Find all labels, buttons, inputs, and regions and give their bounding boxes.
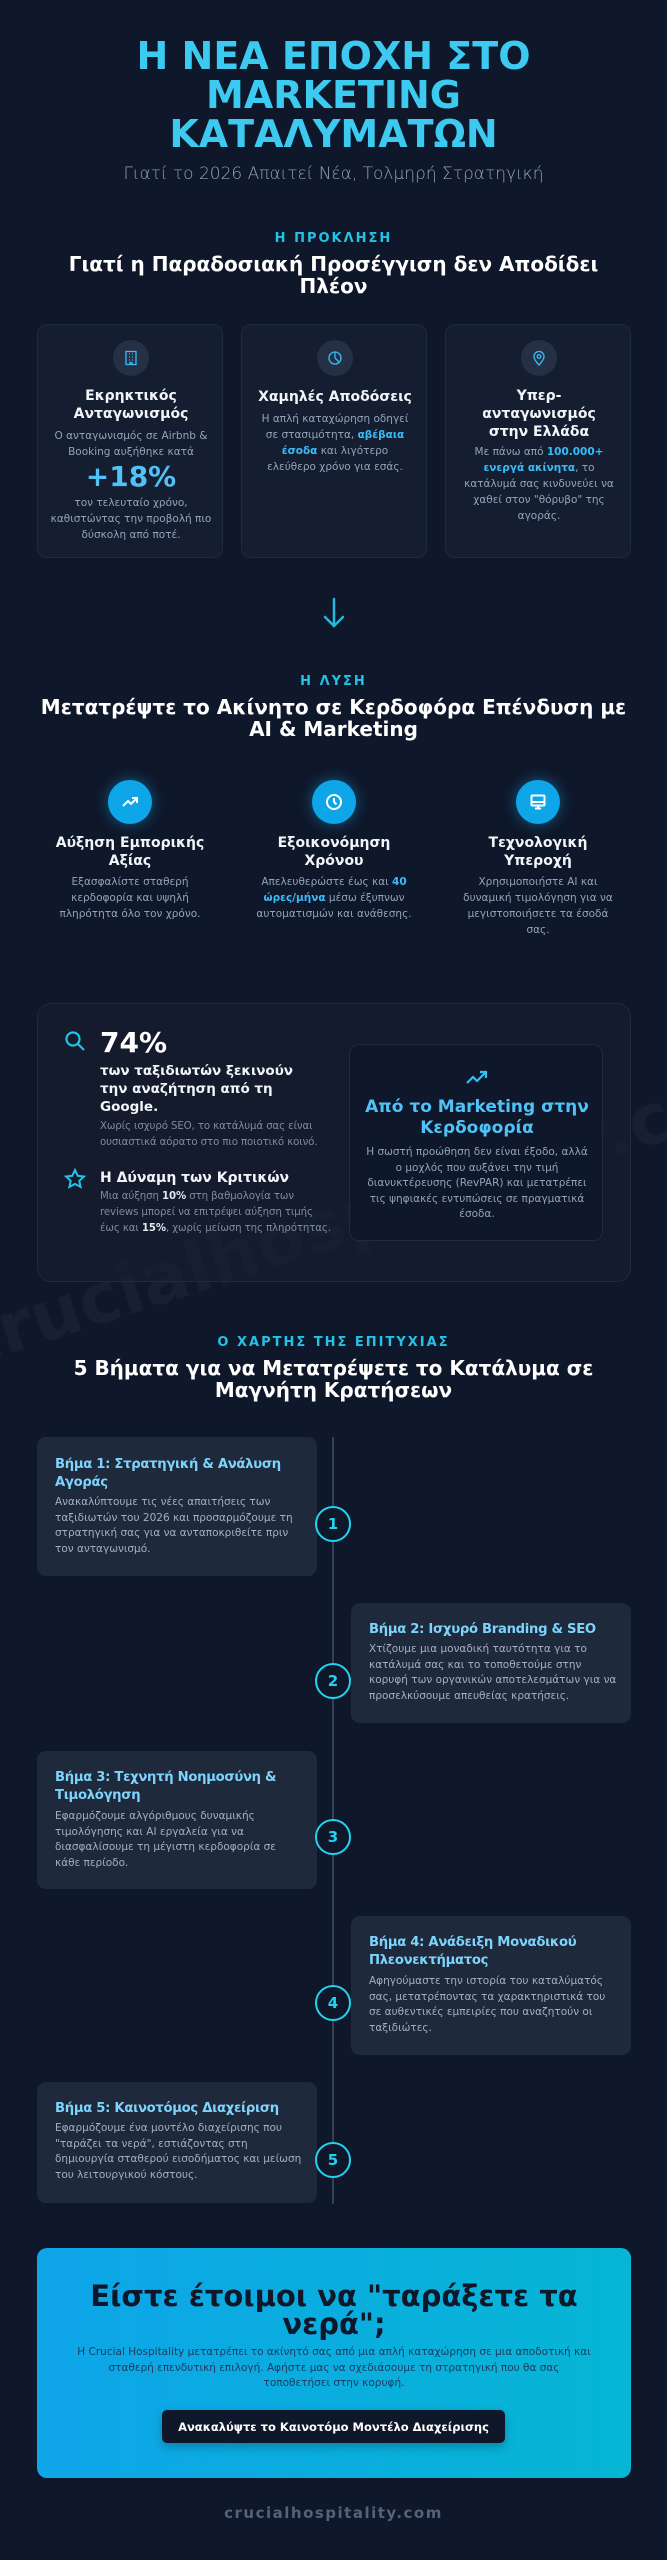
icon: trend	[466, 1070, 488, 1084]
panel: call to action	[37, 2248, 631, 2478]
callout: marketing to profit: Από το Marketing στην Κερδοφορία	[365, 1097, 589, 1138]
step 4: Αφηγούμαστε την ιστορία του καταλύματός σας, μετατρέποντας τα χαρακτηριστικά του σε αυθεντικές εμπειρίες που αναζητούν οι ταξιδιώτες.	[369, 1975, 605, 2034]
subtitle: Γιατί το 2026 Απαιτεί Νέα, Τολμηρή Στρατηγική	[123, 164, 544, 184]
step 5: Βήμα 5: Καινοτόμος Διαχείριση	[55, 2101, 279, 2116]
step 4: Βήμα 4: Ανάδειξη Μοναδικού Πλεονεκτήματος	[369, 1935, 576, 1968]
marker 5: 5	[328, 2151, 338, 2169]
title: MARKETING	[206, 73, 461, 117]
step 1: Ανακαλύπτουμε τις νέες απαιτήσεις των ταξιδιωτών του 2026 και προσαρμόζουμε τη στρατηγική σας για να ανταποκριθείτε πριν τον ανταγωνισμό.	[55, 1496, 293, 1555]
card: competition: +18%	[86, 460, 176, 493]
cta heading: Είστε έτοιμοι να "ταράξετε τα νερά";	[90, 2279, 578, 2341]
card: competition: Ανταγωνισμός	[74, 406, 188, 422]
card: greece: Υπερ-	[517, 388, 561, 404]
heading: roadmap: 5 Βήματα για να Μετατρέψετε το Κατάλυμα σε Μαγνήτη Κρατήσεων	[74, 1356, 593, 1402]
cta button: Ανακαλύψτε το Καινοτόμο Μοντέλο Διαχείρισης	[178, 2420, 489, 2434]
step 2: Χτίζουμε μια μοναδική ταυτότητα για το κατάλυμά σας και το τοποθετούμε στην κορυφή των οργανικών αποτελεσμάτων για να προσελκύσουμε απευθείας κρατήσεις.	[369, 1643, 616, 1702]
card: low returns: Χαμηλές Αποδόσεις	[258, 389, 412, 405]
step 3: Εφαρμόζουμε αλγόριθμους δυναμικής τιμολόγησης και AI εργαλεία για να διασφαλίσουμε τη μέγιστη κερδοφορία σε κάθε περίοδο.	[55, 1810, 276, 1869]
panel: solution benefits	[56, 772, 613, 936]
card: greece	[445, 324, 631, 558]
icon: search	[65, 1031, 85, 1051]
card: competition: τον τελευταίο χρόνο, καθιστώντας την προβολή πιο δύσκολη από ποτέ.	[51, 497, 211, 541]
step 2	[351, 1603, 631, 1723]
marker 2: 2	[328, 1672, 338, 1690]
callout: marketing to profit: Η σωστή προώθηση δεν είναι έξοδο, αλλά ο μοχλός που αυξάνει την τιμή διανυκτέρευσης (RevPAR) και μετατρέπει τις ψηφιακές εντυπώσεις σε πραγματικά έσοδα.	[366, 1146, 588, 1220]
icon: star	[64, 1168, 86, 1189]
cta text: Η Crucial Hospitality μετατρέπει το ακίνητό σας από μια απλή καταχώρηση σε μια αποδοτική και σταθερή επενδυτική επιλογή. Αφήστε μας να σχεδιάσουμε τη στρατηγική που θα σας τοποθετήσει στην κορυφή.	[77, 2346, 591, 2389]
card: competition	[37, 324, 223, 558]
stat: 74%: 74%	[100, 1026, 167, 1059]
icon: pin	[521, 340, 557, 376]
step 1	[37, 1437, 317, 1576]
marker 4: 4	[328, 1994, 338, 2012]
benefit: tech	[463, 772, 613, 936]
stat: 74%: των ταξιδιωτών ξεκινούν την αναζήτηση από τη Google.	[100, 1063, 293, 1115]
step 5	[37, 2082, 317, 2203]
step 5: Εφαρμόζουμε ένα μοντέλο διαχείρισης που "ταράζει τα νερά", εστιάζοντας στη δημιουργία σταθερού εισοδήματος και μείωση του λειτουργικού κόστους.	[55, 2122, 301, 2181]
marker 1: 1	[328, 1515, 338, 1533]
benefit: tech: Υπεροχή	[504, 853, 572, 869]
card: greece: στην Ελλάδα	[489, 424, 589, 440]
timeline	[37, 1437, 631, 2204]
benefit: tech: Τεχνολογική	[489, 835, 587, 851]
marker 3: 3	[328, 1828, 338, 1846]
label: solution: Η ΛΥΣΗ	[300, 674, 367, 689]
footer: crucialhospitality.com	[224, 2504, 443, 2522]
step 3: Βήμα 3: Τεχνητή Νοημοσύνη & Τιμολόγηση	[55, 1770, 276, 1803]
icon: clock	[312, 780, 356, 824]
card: greece: Με πάνω από 100.000+ ενεργά ακίνητα, το κατάλυμά σας κινδυνεύει να χαθεί στον "θόρυβο" της αγοράς.	[464, 446, 614, 522]
stat: reviews: Μια αύξηση 10% στη βαθμολογία των reviews μπορεί να επιτρέψει αύξηση τιμής έως και 15%, χωρίς μείωση της πληρότητας.	[100, 1191, 331, 1234]
benefit: value	[56, 772, 204, 920]
benefit: time: Εξοικονόμηση	[278, 835, 390, 851]
label: challenge: Η ΠΡΟΚΛΗΣΗ	[275, 231, 392, 246]
stat: reviews: Η Δύναμη των Κριτικών	[100, 1170, 289, 1186]
panel: challenge cards	[37, 324, 631, 558]
step 1: Βήμα 1: Στρατηγική & Ανάλυση Αγοράς	[55, 1457, 281, 1490]
icon: monitor	[516, 780, 560, 824]
title: ΚΑΤΑΛΥΜΑΤΩΝ	[169, 112, 498, 156]
marker 4	[315, 1985, 351, 2021]
callout: marketing to profit	[349, 1044, 603, 1241]
step 4	[351, 1916, 631, 2055]
marker 5	[315, 2142, 351, 2178]
icon: trending up	[108, 780, 152, 824]
title: Η ΝΕΑ ΕΠΟΧΗ ΣΤΟ	[136, 34, 530, 78]
benefit: value: Εξασφαλίστε σταθερή κερδοφορία και υψηλή πληρότητα όλο τον χρόνο.	[60, 876, 200, 920]
cta button	[162, 2410, 505, 2443]
marker 2	[315, 1663, 351, 1699]
card: low returns: Η απλή καταχώρηση οδηγεί σε στασιμότητα, αβέβαια έσοδα και λιγότερο ελεύθερο χρόνο για εσάς.	[262, 413, 408, 473]
heading: challenge: Γιατί η Παραδοσιακή Προσέγγιση δεν Αποδίδει Πλέον	[69, 252, 598, 298]
card: low returns	[241, 324, 427, 558]
marker 3	[315, 1819, 351, 1855]
card: competition: Εκρηκτικός	[85, 388, 177, 404]
card: competition: Ο ανταγωνισμός σε Airbnb & Booking αυξήθηκε κατά	[55, 430, 207, 458]
benefit: time	[256, 772, 412, 920]
panel: stats	[37, 1003, 631, 1282]
heading: solution: Μετατρέψτε το Ακίνητο σε Κερδοφόρα Επένδυση με AI & Marketing	[41, 695, 626, 741]
benefit: time: Χρόνου	[304, 853, 364, 869]
title	[136, 34, 530, 156]
icon: chart	[317, 340, 353, 376]
stat: reviews	[100, 1170, 331, 1234]
arrow: down	[324, 598, 344, 628]
label: roadmap: Ο ΧΑΡΤΗΣ ΤΗΣ ΕΠΙΤΥΧΙΑΣ	[217, 1335, 450, 1350]
step 3	[37, 1751, 317, 1889]
stat: 74%	[100, 1026, 317, 1148]
card: greece: ανταγωνισμός	[482, 406, 596, 422]
marker 1	[315, 1506, 351, 1542]
benefit: tech: Χρησιμοποιήστε AI και δυναμική τιμολόγηση για να μεγιστοποιήσετε τα έσοδά σας.	[463, 876, 613, 936]
icon: building	[113, 340, 149, 376]
step 2: Βήμα 2: Ισχυρό Branding & SEO	[369, 1622, 596, 1637]
benefit: value: Αύξηση Εμπορικής Αξίας	[56, 835, 204, 869]
stat: 74%: Χωρίς ισχυρό SEO, το κατάλυμά σας είναι ουσιαστικά αόρατο στο πιο ποιοτικό κοινό.	[100, 1121, 317, 1148]
benefit: time: Απελευθερώστε έως και 40 ώρες/μήνα μέσω έξυπνων αυτοματισμών και ανάθεσης.	[256, 876, 412, 920]
